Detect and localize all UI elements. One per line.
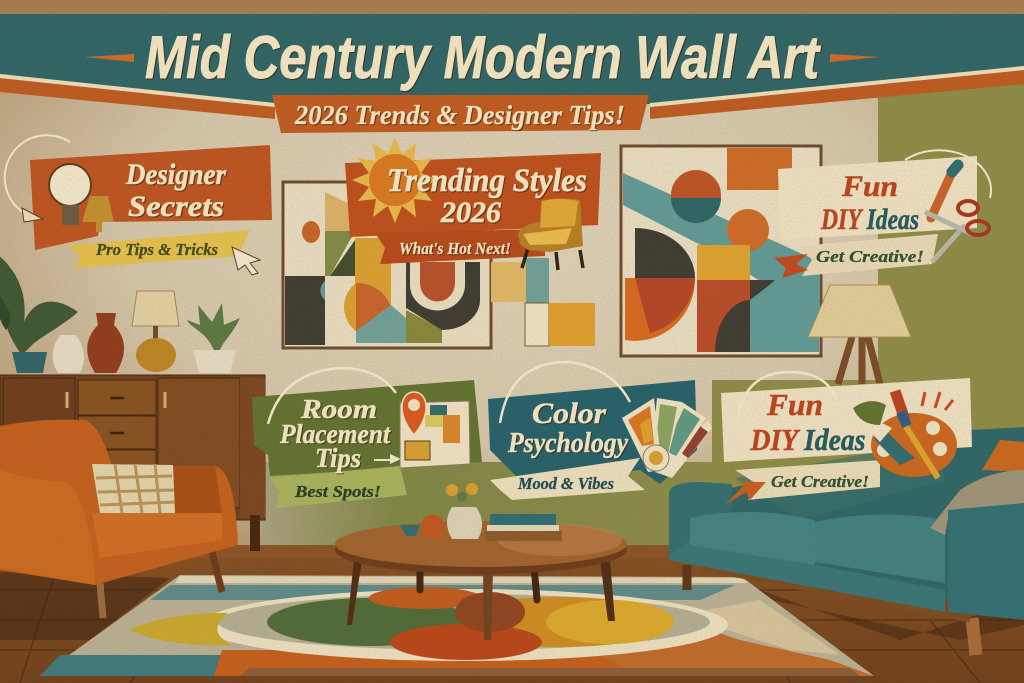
plant left — [0, 255, 78, 373]
heading: Room — [300, 394, 377, 424]
title banner — [0, 14, 1024, 119]
coffee table — [335, 483, 627, 640]
heading: Fun — [841, 170, 898, 203]
teal sofa — [669, 427, 1024, 655]
rug — [40, 575, 874, 676]
tagline: Mood & Vibes — [517, 474, 614, 493]
orange pillow — [982, 440, 1024, 472]
icon: palette and brushes — [853, 391, 957, 478]
panel: designer secrets: Secrets — [128, 190, 224, 223]
tagline: Best Spots! — [294, 482, 381, 501]
panel: room placement — [252, 368, 482, 508]
panel: room placement: Tips — [315, 443, 361, 473]
small bowl — [400, 525, 420, 536]
heading: Trending Styles — [387, 163, 587, 199]
panel: designer secrets — [5, 135, 272, 275]
grey throw blanket — [930, 470, 1024, 535]
red teapot — [422, 515, 443, 539]
panel: fun DIY ideas bottom: DIY Ideas — [750, 422, 866, 457]
wooden ceiling trim — [0, 0, 1024, 14]
panel: art left — [283, 182, 595, 348]
vase of flowers — [446, 483, 482, 539]
potted plant — [187, 303, 240, 373]
floor lamp — [808, 285, 911, 384]
panel: color psychology — [488, 362, 712, 500]
icon: arrow — [374, 454, 401, 464]
red vase — [87, 313, 124, 373]
icon: colour swatch fan — [622, 398, 712, 478]
icon: paintbrush and scissors — [925, 165, 989, 262]
panel: fun DIY ideas top — [774, 150, 991, 278]
white vase — [52, 335, 84, 373]
sideboard — [0, 375, 265, 551]
decor on sideboard — [0, 255, 240, 373]
heading: Designer — [125, 158, 226, 191]
table lamp — [132, 291, 179, 372]
floor — [0, 558, 1024, 683]
tagline: Get Creative! — [771, 472, 869, 491]
plaid cushion — [92, 464, 175, 513]
panel: room placement: Placement — [279, 419, 391, 449]
stacked books — [485, 514, 562, 541]
tagline: Pro Tips & Tricks — [95, 240, 218, 259]
icon: cursor arrow — [232, 247, 260, 275]
icon: table lamp — [82, 196, 114, 232]
orange armchair — [0, 420, 238, 618]
panel: fun DIY ideas bottom — [721, 372, 972, 505]
icon: sun — [352, 137, 438, 223]
panel: color psychology: Psychology — [507, 427, 628, 459]
icon: armchair — [518, 198, 583, 270]
icon: light bulb — [5, 135, 91, 225]
heading: Color — [532, 397, 606, 430]
heading: Fun — [766, 387, 823, 422]
tagline: Get Creative! — [816, 247, 924, 266]
tagline: What's Hot Next! — [399, 239, 511, 258]
panel: fun DIY ideas top: DIY Ideas — [820, 203, 919, 236]
panel: trending styles: 2026 — [440, 196, 501, 229]
panel: trending styles — [345, 137, 601, 270]
title: Mid Century Modern Wall Art — [145, 24, 821, 91]
icon: arrow — [725, 482, 766, 505]
subtitle ribbon: 2026 Trends & Designer Tips! — [294, 100, 625, 130]
panel: art right — [621, 146, 821, 356]
icon: floor plan and pin — [400, 392, 470, 468]
icon: arrow — [774, 254, 808, 278]
